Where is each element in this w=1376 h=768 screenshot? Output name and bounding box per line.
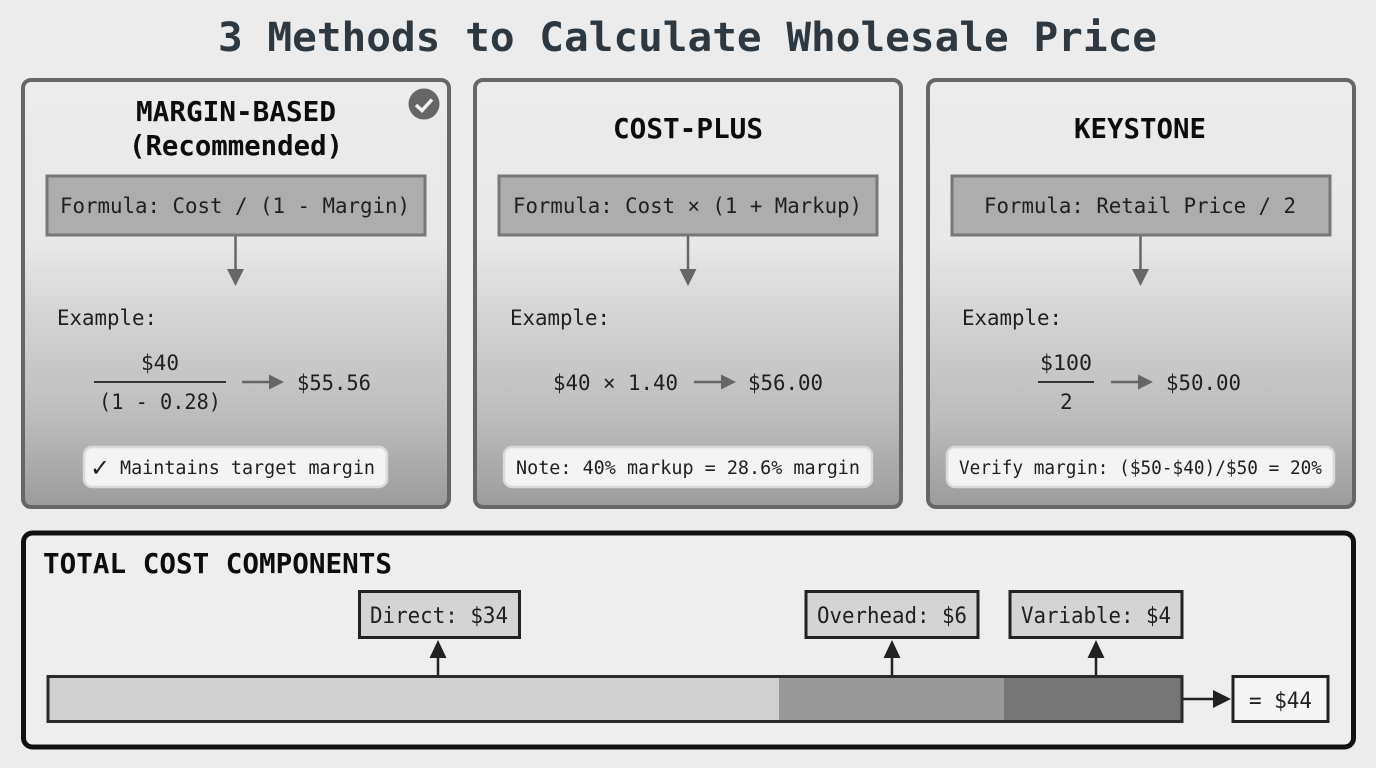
arrow: formula to example [227, 236, 244, 286]
note: verify margin [947, 447, 1334, 487]
note: markup versus margin: Note: 40% markup = 28.6% margin [516, 458, 860, 479]
note: maintains target margin [84, 447, 387, 487]
note: markup versus margin [504, 447, 872, 487]
example calculation: 2 [1060, 390, 1073, 414]
heading: margin-based: MARGIN-BASED [136, 95, 336, 128]
example calculation: $100 [1040, 351, 1092, 375]
formula box [47, 176, 425, 235]
formula box: Formula: Cost × (1 + Markup) [513, 194, 862, 218]
panel: cost-plus [475, 80, 901, 507]
heading: keystone: KEYSTONE [1074, 112, 1206, 145]
example label: Example: [510, 306, 610, 330]
label: direct [360, 592, 520, 638]
example calculation [1038, 351, 1241, 414]
example calculation [94, 351, 371, 414]
arrow: direct segment to label [430, 640, 446, 676]
total box [1233, 676, 1328, 722]
formula box [499, 176, 877, 235]
example calculation [553, 371, 823, 395]
example label: Example: [57, 306, 157, 330]
arrow: overhead segment to label [884, 640, 900, 676]
label: variable [1010, 592, 1182, 638]
panel: margin-based [23, 80, 449, 507]
note: maintains target margin: ✓ [90, 454, 110, 482]
label: overhead: Overhead: $6 [817, 604, 967, 629]
label: variable: Variable: $4 [1021, 604, 1171, 629]
label: overhead [806, 592, 978, 638]
example calculation: $56.00 [748, 371, 823, 395]
heading: margin-based: (Recommended) [129, 129, 343, 162]
note: maintains target margin: Maintains target margin [120, 458, 375, 479]
arrow: formula to example [1132, 236, 1149, 286]
example calculation: $40 [141, 351, 179, 375]
arrow: bar to total [1183, 690, 1231, 708]
note: verify margin: Verify margin: ($50-$40)/$50 = 20% [959, 458, 1322, 479]
arrow: variable segment to label [1088, 640, 1104, 676]
heading: margin-based [129, 95, 343, 162]
example calculation: (1 - 0.28) [99, 390, 221, 414]
title: 3 Methods to Calculate Wholesale Price [218, 15, 1157, 61]
formula box: Formula: Retail Price / 2 [984, 194, 1296, 218]
formula box: Formula: Cost / (1 - Margin) [60, 194, 410, 218]
icon: recommended check badge [408, 88, 440, 120]
example calculation: $55.56 [297, 371, 371, 395]
example calculation: $40 × 1.40 [553, 371, 678, 395]
panel: keystone [928, 80, 1354, 507]
example label: Example: [962, 306, 1062, 330]
heading: total cost components: TOTAL COST COMPONENTS [43, 547, 392, 580]
heading: cost-plus: COST-PLUS [613, 112, 763, 145]
total box: = $44 [1249, 689, 1312, 714]
arrow: formula to example [680, 236, 696, 286]
label: direct: Direct: $34 [370, 604, 508, 629]
stacked cost bar [48, 676, 1182, 722]
panel: total cost components [24, 533, 1354, 747]
formula box [952, 176, 1330, 235]
example calculation: $50.00 [1166, 371, 1241, 395]
